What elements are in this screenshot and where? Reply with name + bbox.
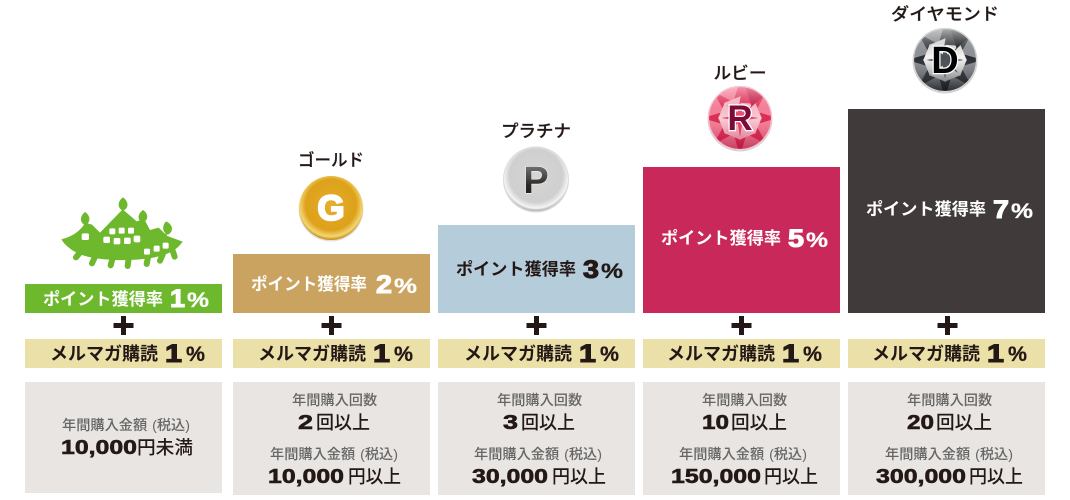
purchase condition: 年間購入金額 (税込) [270, 446, 398, 463]
tier name: ルビー [714, 64, 766, 83]
bar: point rate 5% [643, 167, 840, 313]
purchase condition: 年間購入金額 (税込) [885, 446, 1013, 463]
bar: point rate 2%: 2 [376, 271, 392, 299]
purchase condition: 円以上 [969, 466, 1023, 487]
icon: diamond gem D [912, 28, 978, 94]
newsletter bonus 1% [438, 339, 635, 368]
purchase condition: 年間購入金額 (税込) [679, 446, 807, 463]
bar: point rate 7%: % [1011, 200, 1033, 223]
newsletter bonus 1%: % [803, 343, 822, 366]
newsletter bonus 1%: % [394, 343, 413, 366]
column 3: platinum tier [438, 122, 635, 495]
purchase condition: 10,000 [268, 465, 344, 488]
purchase condition: 10,000 [61, 436, 137, 459]
newsletter bonus 1%: % [600, 343, 619, 366]
column 2: gold tier [233, 150, 430, 495]
purchase condition: 円未満 [137, 437, 193, 458]
newsletter bonus 1%: メルマガ購読 [872, 344, 980, 364]
newsletter bonus 1%: 1 [373, 340, 390, 368]
purchase condition: 300,000 [876, 465, 966, 488]
purchase condition: 年間購入回数 [292, 392, 377, 409]
newsletter bonus 1%: 1 [987, 340, 1004, 368]
bar: point rate 7%: ポイント獲得率 [866, 199, 986, 219]
purchase condition: 10 [702, 411, 729, 434]
plus sign [938, 316, 958, 335]
purchase condition: 円以上 [764, 466, 818, 487]
icon: gold medal G [298, 176, 364, 242]
purchase condition [438, 382, 635, 495]
bar: point rate 1% [25, 284, 222, 313]
bar: point rate 7%: 7 [993, 196, 1009, 224]
newsletter bonus 1%: % [1008, 343, 1027, 366]
purchase condition: 3 [503, 411, 518, 434]
purchase condition: 30,000 [472, 465, 548, 488]
column 4: ruby tier [643, 58, 840, 495]
purchase condition: 回以上 [936, 412, 992, 433]
column 5: diamond tier [848, 0, 1045, 495]
bar: point rate 1%: % [187, 289, 209, 312]
plus sign [732, 316, 752, 335]
plus sign [322, 316, 342, 335]
newsletter bonus 1%: 1 [579, 340, 596, 368]
purchase condition [848, 382, 1045, 495]
column 1: green base tier [25, 197, 222, 493]
purchase condition: 年間購入金額 (税込) [474, 446, 602, 463]
tier name: プラチナ [501, 122, 571, 141]
purchase condition: 年間購入回数 [907, 392, 992, 409]
bar: point rate 5%: 5 [788, 225, 804, 253]
purchase condition: 回以上 [316, 412, 370, 433]
newsletter bonus 1%: メルマガ購読 [50, 344, 158, 364]
purchase condition [643, 382, 840, 495]
purchase condition: 20 [907, 411, 934, 434]
newsletter bonus 1% [25, 339, 222, 368]
bar: point rate 7% [848, 109, 1045, 313]
bar: point rate 3% [438, 225, 635, 313]
plus sign [526, 316, 546, 335]
icon: green turtle castle logo [61, 197, 183, 266]
newsletter bonus 1%: メルマガ購読 [258, 344, 366, 364]
purchase condition: 円以上 [552, 466, 606, 487]
purchase condition: 年間購入金額 (税込) [62, 417, 190, 434]
purchase condition: 2 [298, 411, 313, 434]
icon: ruby gem R: R [727, 99, 753, 138]
plus sign [114, 316, 134, 335]
icon: ruby gem R [708, 86, 772, 152]
purchase condition [25, 382, 222, 493]
bar: point rate 2%: ポイント獲得率 [251, 274, 367, 294]
bar: point rate 2%: % [394, 275, 417, 298]
newsletter bonus 1%: メルマガ購読 [667, 344, 775, 364]
bar: point rate 3%: ポイント獲得率 [456, 259, 576, 279]
newsletter bonus 1% [233, 339, 430, 368]
newsletter bonus 1%: % [186, 343, 205, 366]
icon: diamond gem D: D [931, 40, 959, 82]
purchase condition: 年間購入回数 [497, 392, 582, 409]
tier name: ダイヤモンド [891, 4, 999, 24]
purchase condition [233, 382, 430, 495]
bar: point rate 1%: ポイント獲得率 [43, 289, 163, 309]
purchase condition: 年間購入回数 [702, 392, 787, 409]
bar: point rate 5%: ポイント獲得率 [661, 228, 781, 248]
bar: point rate 1%: 1 [170, 285, 185, 313]
purchase condition: 回以上 [521, 412, 575, 433]
tier name: ゴールド [298, 150, 364, 170]
purchase condition: 回以上 [731, 412, 787, 433]
newsletter bonus 1% [848, 339, 1045, 368]
newsletter bonus 1%: メルマガ購読 [464, 344, 572, 364]
purchase condition: 150,000 [671, 465, 761, 488]
newsletter bonus 1%: 1 [782, 340, 799, 368]
icon: gold medal G: G [317, 189, 345, 228]
bar: point rate 3%: 3 [583, 256, 599, 284]
newsletter bonus 1%: 1 [165, 340, 182, 368]
purchase condition: 円以上 [348, 466, 401, 487]
newsletter bonus 1% [643, 339, 840, 368]
icon: platinum medal P [503, 146, 569, 212]
icon: platinum medal P: P [523, 160, 549, 202]
bar: point rate 5%: % [806, 229, 828, 252]
bar: point rate 3%: % [601, 260, 623, 283]
bar: point rate 2% [233, 254, 430, 313]
